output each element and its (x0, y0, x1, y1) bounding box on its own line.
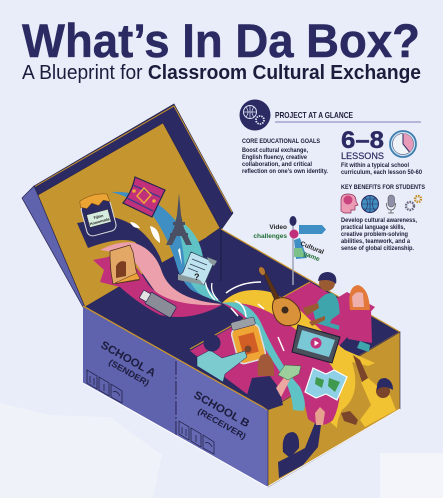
icon: world map (305, 368, 347, 400)
text: lesson fit (341, 162, 422, 176)
icon: pickle jar (229, 316, 267, 365)
teal stream (222, 302, 305, 411)
label: school A: SCHOOL A (99, 339, 158, 380)
yellow stream (222, 290, 375, 428)
stat: 6–8 lessons: 6–8 (341, 127, 384, 154)
text: goals: reflection on one’s own identity. (242, 168, 328, 175)
icon: globe and gear (240, 100, 270, 130)
label: video challenges: challenges (253, 233, 287, 240)
icon: globe (362, 196, 378, 212)
white accents (226, 282, 284, 351)
box lid (22, 104, 233, 307)
icon: jam jar (78, 191, 117, 237)
figure: boy in teal shirt (303, 272, 340, 330)
magenta stream (222, 303, 340, 425)
heading: key benefits: KEY BENEFITS FOR STUDENTS (341, 184, 425, 191)
text: benefits (341, 217, 417, 252)
box interior (83, 229, 400, 410)
streams into box (222, 282, 375, 428)
lid left flap (22, 186, 92, 307)
subtitle: A Blueprint for Classroom Cultural Exchange (22, 61, 421, 84)
label: video challenges: Video (269, 224, 287, 231)
label: video challenges (253, 224, 287, 240)
text: goals: Boost cultural exchange, (242, 147, 308, 154)
pole (292, 222, 294, 285)
panel: project at a glance (240, 100, 425, 252)
text: benefits: sense of global citizenship. (341, 245, 414, 252)
label: school A: (SENDER) (107, 357, 151, 388)
text: benefits: Develop cultural awareness, (341, 217, 417, 224)
magenta ribbon (93, 252, 222, 317)
icon: head (341, 194, 358, 213)
text: goals: English fluency, creative (242, 154, 307, 161)
figure: woman in pink sweater (330, 285, 372, 352)
interior magenta floor (190, 282, 375, 410)
text: lesson fit: Fit within a typical school (341, 162, 409, 169)
icon: paper scroll (178, 252, 217, 285)
label: school B: SCHOOL B (192, 389, 251, 430)
icon: arch monument (110, 245, 140, 284)
interior navy floor and walls (83, 229, 400, 410)
icon: USB drive (138, 288, 177, 318)
text: goals (242, 147, 328, 175)
text: lesson fit: curriculum, each lesson 50-60 (341, 169, 422, 176)
teal stream (175, 217, 222, 303)
white accents (130, 222, 182, 265)
icon: Eiffel tower (166, 193, 192, 245)
right face: gold (268, 332, 400, 487)
icon: paper scroll: ? (194, 272, 200, 282)
figure: person in yellow shirt (341, 355, 396, 427)
pink stream (100, 242, 222, 310)
icon: clock (390, 131, 416, 157)
navy stream (77, 217, 222, 303)
icons: handling marks B (179, 421, 214, 454)
icon: gears (406, 196, 421, 210)
stat: 6–8 lessons: LESSONS (341, 151, 384, 162)
icon: woven rug (123, 177, 165, 217)
text: benefits: abilities, teamwork, and a (341, 238, 410, 245)
lid inner gold panel (38, 123, 220, 307)
left face: school A (83, 306, 176, 435)
icon: microphone (386, 195, 396, 213)
signpost (253, 216, 326, 285)
label: school B (192, 389, 251, 441)
figure: person reaching in navy (278, 407, 325, 478)
heading: project at a glance: PROJECT AT A GLANCE (275, 110, 353, 120)
figure: woman in navy from behind (247, 354, 291, 410)
blue stream (111, 192, 222, 303)
label: cultural game: Cultural (299, 240, 325, 256)
icon: tablet (292, 325, 340, 363)
icons: handling marks A (87, 370, 122, 403)
figure: man in teal from behind (197, 334, 252, 382)
text: benefits: creative problem-solving (341, 231, 408, 238)
box front faces (83, 306, 400, 487)
label: cultural game (299, 240, 325, 263)
label: school B: (RECEIVER) (196, 406, 248, 441)
streams from lid (77, 192, 222, 317)
sign arrows (299, 225, 326, 234)
icon: lute (257, 266, 301, 326)
icon: jam jar: Fijian (93, 214, 104, 220)
text: goals: collaboration, and critical (242, 161, 312, 168)
centre face: school B (176, 359, 268, 487)
title: What’s In Da Box? (22, 14, 420, 67)
lid top and right flaps (34, 104, 233, 307)
text: benefits: practical language skills, (341, 224, 405, 231)
icon: jam jar: Homemade (89, 217, 110, 226)
icon: banknotes (278, 365, 301, 380)
label: cultural game: game (302, 250, 321, 263)
heading: core educational goals: CORE EDUCATIONAL GOALS (242, 138, 320, 145)
